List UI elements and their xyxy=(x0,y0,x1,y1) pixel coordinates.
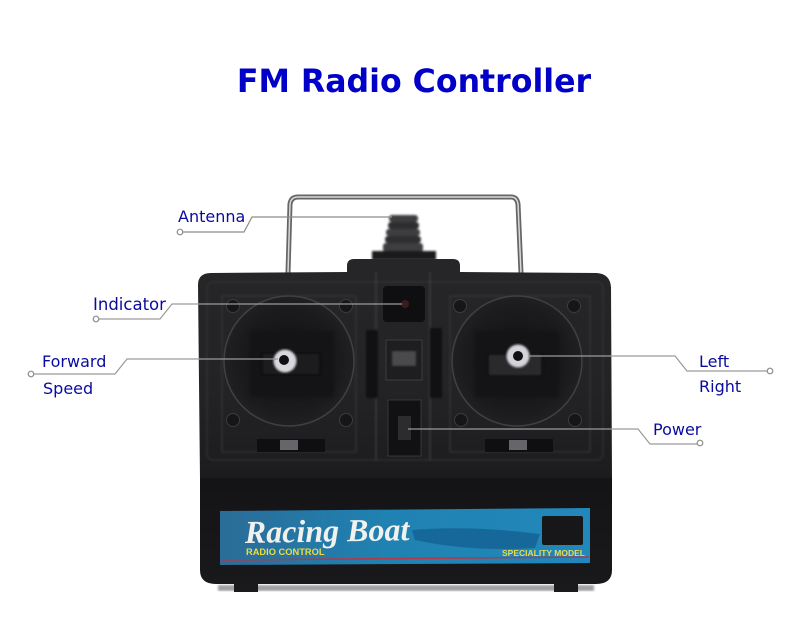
callout: forward speed: Speed xyxy=(43,379,93,398)
antenna stub xyxy=(372,215,436,260)
callout: left right: Left xyxy=(699,352,729,371)
inner panel edges xyxy=(207,272,603,460)
title: FM Radio Controller xyxy=(237,64,592,100)
centre indicator and trim xyxy=(366,286,442,398)
racing boat label xyxy=(220,508,590,565)
racing boat label: SPECIALITY MODEL xyxy=(502,548,585,558)
right stick assembly xyxy=(452,296,582,452)
callout: left right xyxy=(528,352,773,396)
case upper body xyxy=(198,259,612,478)
left stick assembly xyxy=(224,296,354,452)
case lower base xyxy=(200,478,612,584)
callout: indicator xyxy=(93,295,402,322)
callout: antenna xyxy=(177,207,392,235)
racing boat label: RADIO CONTROL xyxy=(246,547,325,557)
power switch xyxy=(388,400,421,456)
callout: power xyxy=(408,420,703,446)
callout: forward speed: Forward xyxy=(42,352,106,371)
callout: left right: Right xyxy=(699,377,741,396)
controller photo illustration xyxy=(198,197,612,592)
callout: forward speed xyxy=(28,352,278,398)
racing boat label: Racing Boat xyxy=(244,511,411,550)
feet and shadow xyxy=(218,584,594,592)
carry handle xyxy=(288,197,521,273)
callout: power: Power xyxy=(653,420,702,439)
callout: indicator: Indicator xyxy=(93,295,166,314)
callout: antenna: Antenna xyxy=(178,207,245,226)
